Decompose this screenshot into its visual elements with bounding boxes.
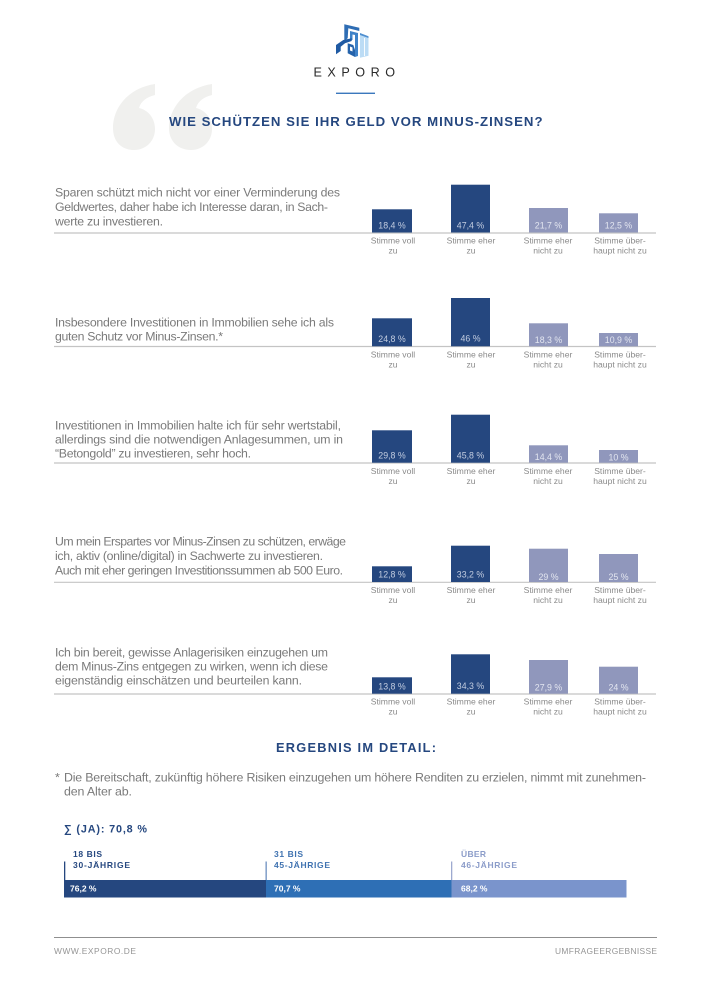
bar chart: zu [388, 595, 398, 605]
panel: statement 5 [54, 646, 656, 717]
segment: 18 to 30: 30-JÄHRIGE [73, 860, 130, 870]
segment: 18 to 30: 18 BIS [73, 849, 102, 859]
bar chart: Stimme voll [371, 697, 415, 707]
bar chart: nicht zu [533, 707, 563, 717]
bar chart: Stimme voll [371, 236, 415, 246]
title: WIE SCHÜTZEN SIE IHR GELD VOR MINUS-ZINSEN? [169, 114, 542, 129]
bar chart: zu [466, 246, 476, 256]
bar chart: haupt nicht zu [593, 595, 647, 605]
statement text [55, 418, 343, 460]
heading: result in detail: ERGEBNIS IM DETAIL: [276, 740, 436, 755]
bar chart: Stimme voll [371, 466, 415, 476]
bar chart: haupt nicht zu [593, 360, 647, 370]
panel: statement 4 [54, 534, 656, 605]
segment: 18 to 30 [64, 849, 266, 898]
bar chart: 45,8 % [457, 451, 484, 461]
statement text [55, 534, 346, 578]
age segmented bar [64, 849, 626, 898]
bar chart: Stimme eher [524, 350, 572, 360]
bar chart: Stimme voll [371, 585, 415, 595]
bar chart: zu [388, 246, 398, 256]
bar chart: Stimme über- [594, 697, 646, 707]
bar chart: Stimme voll [371, 350, 415, 360]
decorative quotation mark [113, 84, 212, 150]
bar chart: 12,8 % [378, 570, 406, 580]
wordmark: EXPORO [314, 66, 395, 80]
statement text: allerdings sind die notwendigen Anlagesummen, um in [55, 432, 343, 446]
statement text: Investitionen in Immobilien halte ich für sehr wertstabil, [55, 418, 341, 432]
segment: over 46 [451, 849, 626, 898]
panel: statement 2 [54, 298, 656, 370]
bar chart: zu [466, 360, 476, 370]
segment: 31 to 45: 70,7 % [274, 883, 301, 893]
statement text: Um mein Erspartes vor Minus-Zinsen zu schützen, erwäge [55, 534, 346, 548]
bar chart: zu [466, 595, 476, 605]
statement text: dem Minus-Zins entgegen zu wirken, wenn ich diese [55, 660, 328, 674]
statement text [55, 316, 334, 344]
bar chart: 25 % [608, 572, 629, 582]
icon: building mark [336, 24, 368, 58]
bar chart: zu [466, 707, 476, 717]
bar chart: 14,4 % [535, 452, 562, 462]
statement text: Auch mit eher geringen Investitionssummen ab 500 Euro. [55, 564, 343, 578]
bar chart: 10,9 % [605, 335, 632, 345]
bar chart: 29 % [538, 572, 559, 582]
bar chart: Stimme eher [524, 585, 572, 595]
statement text: Geldwertes, daher habe ich Interesse daran, in Sach- [55, 200, 328, 214]
bar chart: nicht zu [533, 476, 563, 486]
statement text: guten Schutz vor Minus-Zinsen.* [55, 330, 223, 344]
logo underline [336, 93, 375, 94]
bar chart [54, 546, 656, 605]
statement text: werte zu investieren. [54, 214, 163, 228]
bar chart: 24,8 % [378, 334, 406, 344]
bar chart: 34,3 % [457, 681, 484, 691]
bar chart: haupt nicht zu [593, 246, 647, 256]
bar chart: zu [388, 360, 398, 370]
bar chart: nicht zu [533, 360, 563, 370]
bar chart: 21,7 % [535, 221, 562, 231]
bar chart: Stimme eher [447, 697, 495, 707]
segment: 31 to 45: 45-JÄHRIGE [274, 860, 330, 870]
bar chart: 10 % [608, 452, 629, 462]
segment: over 46: 68,2 % [461, 883, 488, 893]
footnote: Die Bereitschaft, zukünftig höhere Risiken einzugehen um höhere Renditen zu erzielen, nimmt mit zunehmen- [64, 770, 646, 784]
bar chart: 12,5 % [605, 221, 632, 231]
bar chart: Stimme über- [594, 585, 646, 595]
bar chart: Stimme eher [447, 585, 495, 595]
bar chart: haupt nicht zu [593, 476, 647, 486]
logo: Exporo [314, 24, 395, 80]
bar chart [54, 298, 656, 370]
statement text: Ich bin bereit, gewisse Anlagerisiken einzugehen um [55, 646, 328, 660]
bar chart: zu [388, 707, 398, 717]
footnote: * [55, 770, 60, 784]
bar chart: zu [388, 476, 398, 486]
bar chart: 33,2 % [457, 570, 484, 580]
panel: statement 1 [54, 185, 656, 256]
segment: 31 to 45 [266, 849, 452, 898]
bar chart: Stimme eher [447, 236, 495, 246]
statement text [54, 186, 340, 228]
bar chart: Stimme eher [524, 236, 572, 246]
bar chart: 13,8 % [378, 682, 406, 692]
bar chart: 47,4 % [457, 221, 484, 231]
footer: UMFRAGEERGEBNISSE [555, 946, 657, 956]
bar chart: Stimme eher [447, 350, 495, 360]
footnote [55, 770, 646, 798]
bar chart: nicht zu [533, 246, 563, 256]
bar chart: haupt nicht zu [593, 707, 647, 717]
bar chart: Stimme über- [594, 236, 646, 246]
total yes: ∑ (JA): 70,8 % [64, 824, 147, 836]
bar chart: 29,8 % [378, 451, 406, 461]
segment: 18 to 30: 76,2 % [70, 883, 97, 893]
bar chart [54, 654, 656, 717]
bar chart: Stimme eher [524, 466, 572, 476]
bar chart: 18,3 % [535, 335, 562, 345]
footer: WWW.EXPORO.DE [54, 946, 136, 956]
panel: statement 3 [54, 415, 656, 486]
bar chart [54, 185, 656, 256]
bar chart: 46 % [460, 334, 481, 344]
statement text [55, 646, 328, 688]
footnote: den Alter ab. [64, 784, 132, 798]
bar chart: zu [466, 476, 476, 486]
bar chart: Stimme eher [524, 697, 572, 707]
segment: 31 to 45: 31 BIS [274, 849, 303, 859]
bar chart: Stimme eher [447, 466, 495, 476]
segment: over 46: ÜBER [461, 849, 486, 859]
statement text: eigenständig einschätzen und beurteilen kann. [55, 674, 302, 688]
bar chart: Stimme über- [594, 350, 646, 360]
statement text: ich, aktiv (online/digital) in Sachwerte zu investieren. [55, 549, 323, 563]
statement text: Sparen schützt mich nicht vor einer Verminderung des [55, 186, 340, 200]
statement text: Insbesondere Investitionen in Immobilien sehe ich als [55, 316, 334, 330]
bar chart: 27,9 % [535, 682, 562, 692]
segment: over 46: 46-JÄHRIGE [461, 860, 517, 870]
footer [54, 938, 657, 956]
bar chart: 18,4 % [378, 221, 406, 231]
bar chart [54, 415, 656, 486]
bar chart: Stimme über- [594, 466, 646, 476]
statement text: “Betongold” zu investieren, sehr hoch. [55, 446, 251, 460]
bar chart: nicht zu [533, 595, 563, 605]
bar chart: 24 % [608, 682, 629, 692]
